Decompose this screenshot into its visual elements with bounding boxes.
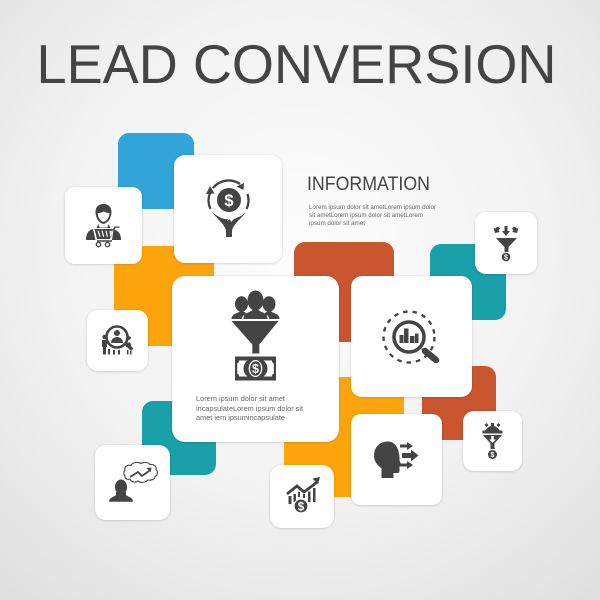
panel: coloured tile teal left xyxy=(142,401,216,475)
panel: coloured tile red bottom xyxy=(422,366,496,440)
icon: gear funnel with coin: $ xyxy=(491,452,495,459)
panel: coloured tile orange bottom xyxy=(284,377,404,497)
text block: information lorem xyxy=(309,204,437,227)
icon: dollar circle with arrows and hand funnel: $ xyxy=(224,192,234,210)
icon: customer with shopping cart xyxy=(86,204,121,247)
icon: person thinking of rising chart xyxy=(109,462,157,502)
icon: people under magnifier xyxy=(102,326,134,354)
panel: main funnel card xyxy=(172,276,339,442)
text block: main card lorem xyxy=(196,394,303,422)
panel: head arrows card xyxy=(351,414,442,505)
text block: main card lorem: Lorem ipsum dolor sit amet xyxy=(196,394,285,403)
text block: main card lorem: amet iem ipsumincapsulate xyxy=(196,413,285,422)
text block: information lorem: sit ametLorem ipsum dolor sit ametLorem xyxy=(309,212,423,219)
panel: dollar cycle card xyxy=(174,155,282,263)
panel: analysis card xyxy=(351,276,472,397)
icon: arrows into funnel with coin: $ xyxy=(504,254,508,262)
icon: magnifier with bar chart and dashed ring xyxy=(384,312,436,362)
panel: thought card xyxy=(95,445,170,520)
panel: cart customer card xyxy=(65,187,142,264)
panel: revenue chart card xyxy=(270,465,334,528)
panel: coloured tile blue xyxy=(118,133,194,209)
panel: gear funnel card xyxy=(463,411,522,471)
heading: information: INFORMATION xyxy=(307,173,430,195)
text block: information lorem: ipsum dolor sit amet xyxy=(309,220,365,227)
panel: coloured tile teal right xyxy=(430,244,506,320)
panel: coloured tile orange left xyxy=(114,246,214,346)
icon: people into funnel with banknote xyxy=(232,290,280,380)
panel: people search card xyxy=(87,310,148,371)
text block: information lorem: Lorem ipsum dolor sit ametLorem ipsum dolor xyxy=(309,204,437,211)
icon: rising chart with dollar coin: $ xyxy=(298,502,305,514)
icon: head profile with arrows xyxy=(374,442,418,478)
panel: small funnel card xyxy=(475,212,537,274)
title: LEAD CONVERSION xyxy=(36,33,556,95)
icon: people into funnel with banknote: $ xyxy=(252,362,259,376)
text block: main card lorem: incapsulateLorem ipsum dolor sit xyxy=(196,404,303,413)
panel: coloured tile red top xyxy=(294,242,394,342)
